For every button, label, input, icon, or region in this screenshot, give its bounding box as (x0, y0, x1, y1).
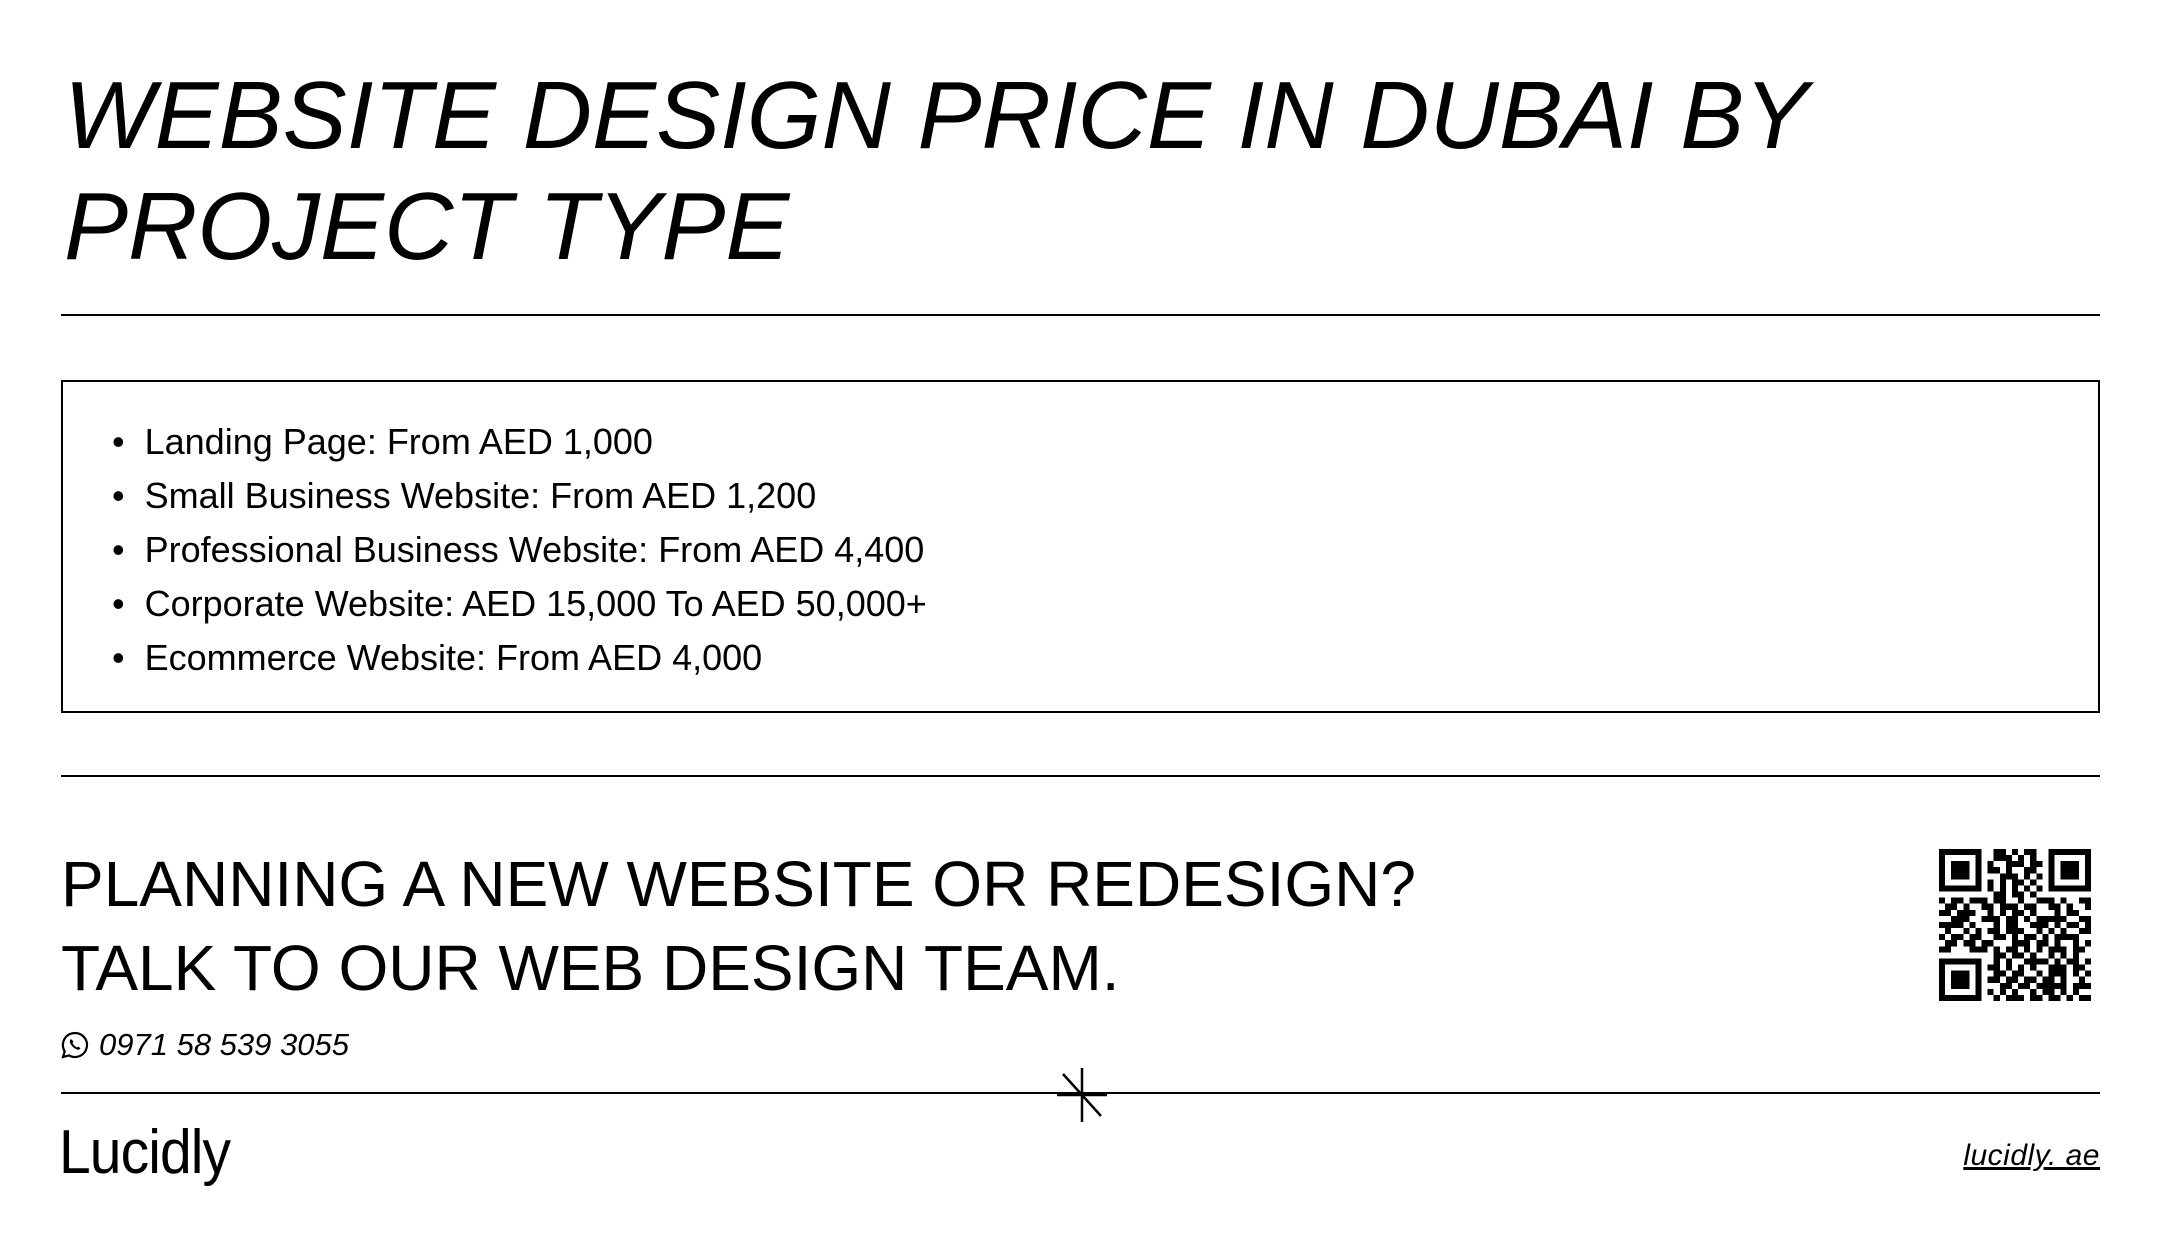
icon: asterisk mark (1057, 1068, 1107, 1122)
price bullet list (112, 421, 927, 678)
phone contact: 0971 58 539 3055 (99, 1027, 349, 1062)
price bullet list: • Ecommerce Website: From AED 4,000 (112, 637, 762, 678)
title: PROJECT TYPE (64, 173, 789, 280)
logo: Lucidly (59, 1118, 230, 1187)
call to action heading: TALK TO OUR WEB DESIGN TEAM. (61, 932, 1120, 1004)
price bullet list: • Small Business Website: From AED 1,200 (112, 475, 816, 516)
call to action heading: PLANNING A NEW WEBSITE OR REDESIGN? (61, 848, 1416, 920)
QR code (1939, 849, 2091, 1001)
call to action heading (61, 848, 1416, 1004)
panel: price list (61, 380, 2100, 713)
price bullet list: • Corporate Website: AED 15,000 To AED 50,000+ (112, 583, 927, 624)
title (64, 62, 1814, 280)
website link: lucidly. ae (1963, 1139, 2100, 1172)
icon: whatsapp (61, 1032, 88, 1059)
title: WEBSITE DESIGN PRICE IN DUBAI BY (64, 62, 1808, 169)
price bullet list: • Professional Business Website: From AED 4,400 (112, 529, 924, 570)
price bullet list: • Landing Page: From AED 1,000 (112, 421, 653, 462)
